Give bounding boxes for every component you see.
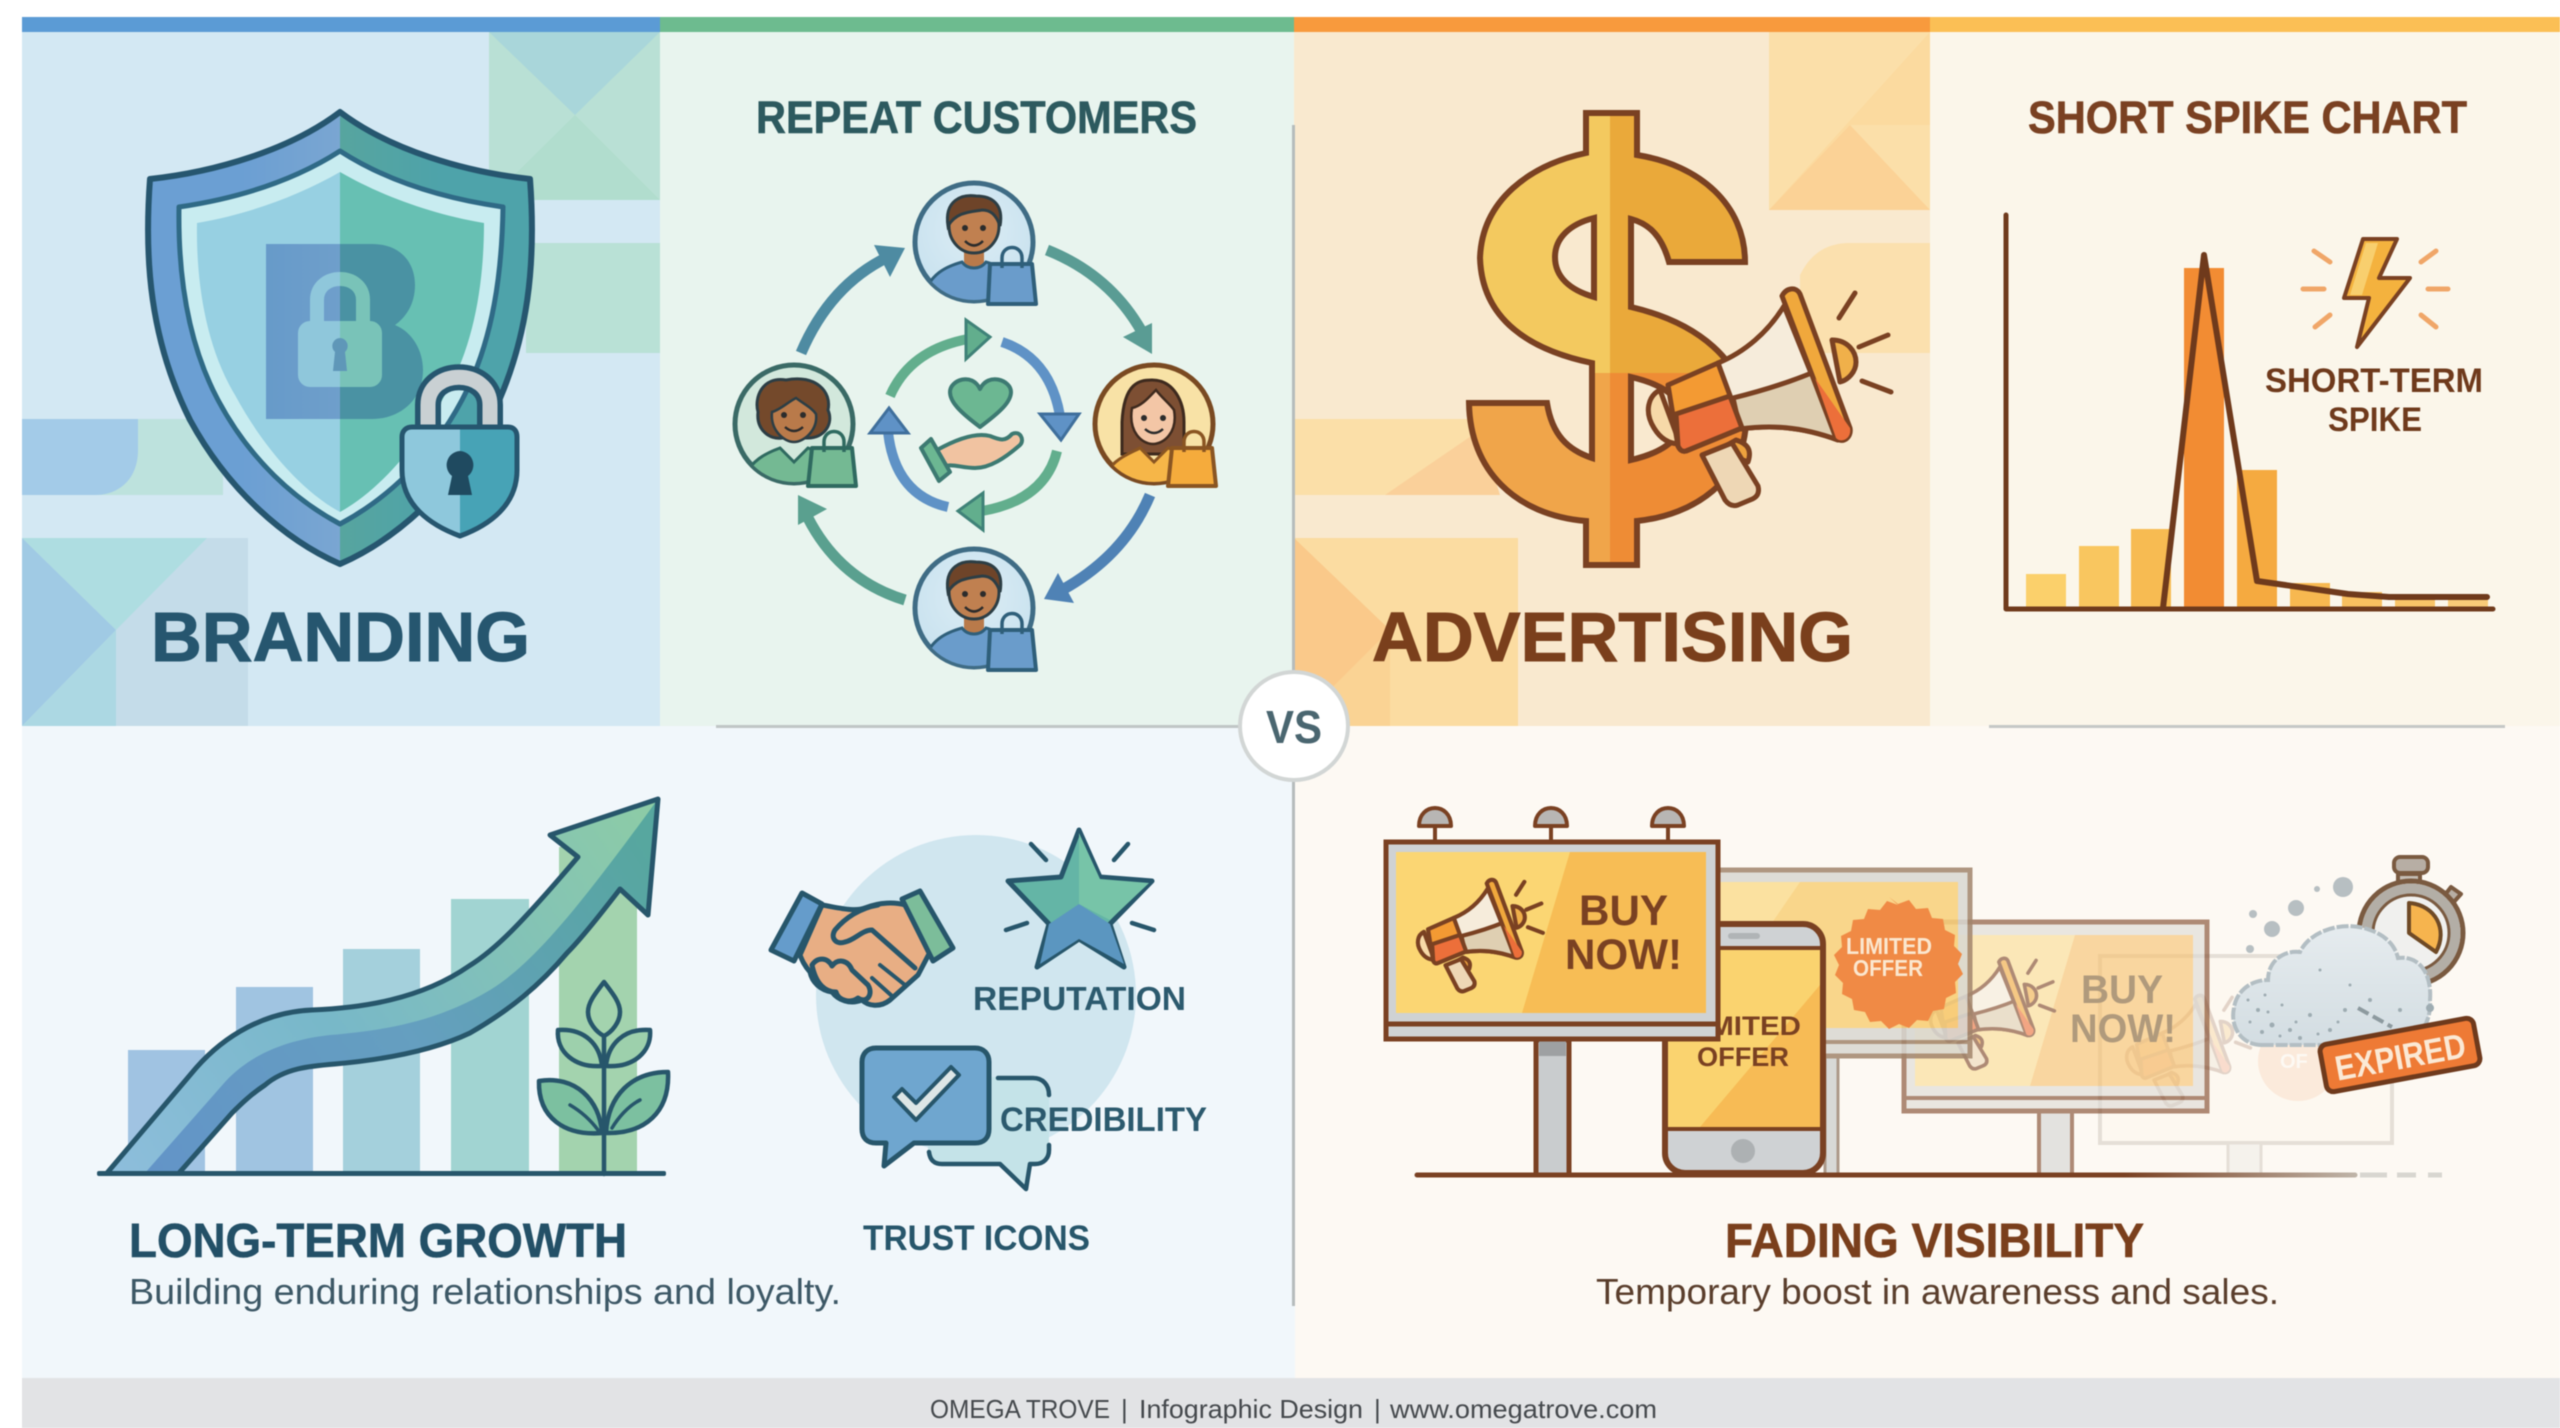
text: faded buy now: NOW! <box>2070 1007 2176 1051</box>
icon: customer right <box>1095 365 1216 486</box>
panel: short spike chart <box>1930 32 2560 726</box>
heading: fading visibility: FADING VISIBILITY <box>1725 1215 2144 1268</box>
heading: advertising: ADVERTISING <box>1372 598 1853 676</box>
text: fading visibility description: Temporary boost in awareness and sales. <box>1596 1271 2279 1312</box>
heading: repeat customers: REPEAT CUSTOMERS <box>756 92 1197 143</box>
icon: customer top <box>915 183 1036 304</box>
icon: phone <box>1665 924 1823 1173</box>
icon: limited offer badge <box>1834 897 1963 1029</box>
icon: letter B with lock <box>266 244 423 419</box>
chart: short spike <box>2006 215 2493 609</box>
icon: faded offer badge: OF <box>2280 1051 2308 1073</box>
footer: OMEGA TROVE <box>930 1394 1110 1424</box>
panel: repeat customers <box>660 32 1294 726</box>
icon: main billboard: BUY <box>1579 887 1668 935</box>
label: reputation: REPUTATION <box>973 980 1186 1017</box>
icon: limited offer badge: OFFER <box>1853 955 1923 981</box>
panel: long-term growth <box>22 726 1295 1378</box>
text: long-term growth description: Building enduring relationships and loyalty. <box>129 1271 841 1312</box>
icon: customer left <box>735 365 856 486</box>
icon: chat bubbles with check <box>862 1048 1049 1189</box>
heading: long-term growth: LONG-TERM GROWTH <box>129 1215 627 1268</box>
icon: stopwatch <box>2359 857 2463 985</box>
icon: heart in hand <box>921 379 1022 481</box>
icon: limited offer badge: LIMITED <box>1846 933 1932 959</box>
footer <box>22 1378 2560 1428</box>
footer: www.omegatrove.com <box>1389 1394 1657 1424</box>
top colour bar <box>22 17 2560 32</box>
panel: branding <box>22 32 660 726</box>
chart: long-term growth bars <box>128 847 637 1174</box>
icon: billboard post <box>1536 1040 1569 1175</box>
icon: billboard 2 <box>1700 870 1970 1175</box>
icon: shield <box>148 112 532 564</box>
label: short-term spike: SHORT-TERM <box>2265 362 2483 400</box>
label: trust icons: TRUST ICONS <box>863 1219 1090 1258</box>
icon: dust particles <box>2246 877 2353 953</box>
footer: | <box>1121 1394 1128 1424</box>
footer: | <box>1374 1394 1381 1424</box>
icon: plant <box>539 982 668 1174</box>
icon: dissolving cloud <box>2233 926 2434 1045</box>
label: credibility: CREDIBILITY <box>1000 1101 1207 1139</box>
icon: inner loop arrows <box>870 320 1079 530</box>
icon: main billboard <box>1386 842 1718 1039</box>
icon: trust backdrop circle <box>816 835 1136 1155</box>
icon: main billboard: NOW! <box>1565 931 1682 979</box>
icon: expired stamp: EXPIRED <box>2332 1026 2469 1089</box>
arrow: growth curve <box>107 799 658 1173</box>
icon: billboard 3 (faded) <box>1904 922 2207 1175</box>
icon: billboard lamps <box>1419 808 1684 842</box>
icon: megaphone <box>1648 289 1891 506</box>
heading: branding: BRANDING <box>151 598 530 676</box>
badge: VS: VS <box>1266 701 1322 753</box>
icon: customer bottom <box>915 549 1036 670</box>
heading: short spike chart: SHORT SPIKE CHART <box>2028 92 2467 143</box>
icon: phone: LIMITED <box>1683 1011 1801 1041</box>
badge: VS <box>1240 672 1348 780</box>
icon: faded offer badge <box>2258 1021 2338 1101</box>
baseline <box>97 1171 666 1176</box>
footer: Infographic Design <box>1139 1394 1363 1424</box>
icon: lightning bolt <box>2303 239 2448 347</box>
panel: fading visibility <box>1295 726 2560 1378</box>
text: faded buy now: BUY <box>2081 968 2163 1012</box>
icon: outer loop arrows <box>798 245 1152 603</box>
ground line <box>1417 1172 2442 1178</box>
label: short-term spike <box>2265 362 2483 439</box>
icon: handshake <box>771 891 953 1005</box>
label: short-term spike: SPIKE <box>2328 401 2422 439</box>
icon: billboard 4 (most faded) <box>2100 956 2392 1175</box>
icon: star <box>1006 830 1154 967</box>
text: faded buy now <box>2070 968 2176 1051</box>
icon: phone: OFFER <box>1697 1042 1789 1072</box>
icon: padlock <box>402 377 517 536</box>
panel: advertising <box>1294 32 1930 726</box>
icon: dollar sign <box>1460 100 1760 573</box>
